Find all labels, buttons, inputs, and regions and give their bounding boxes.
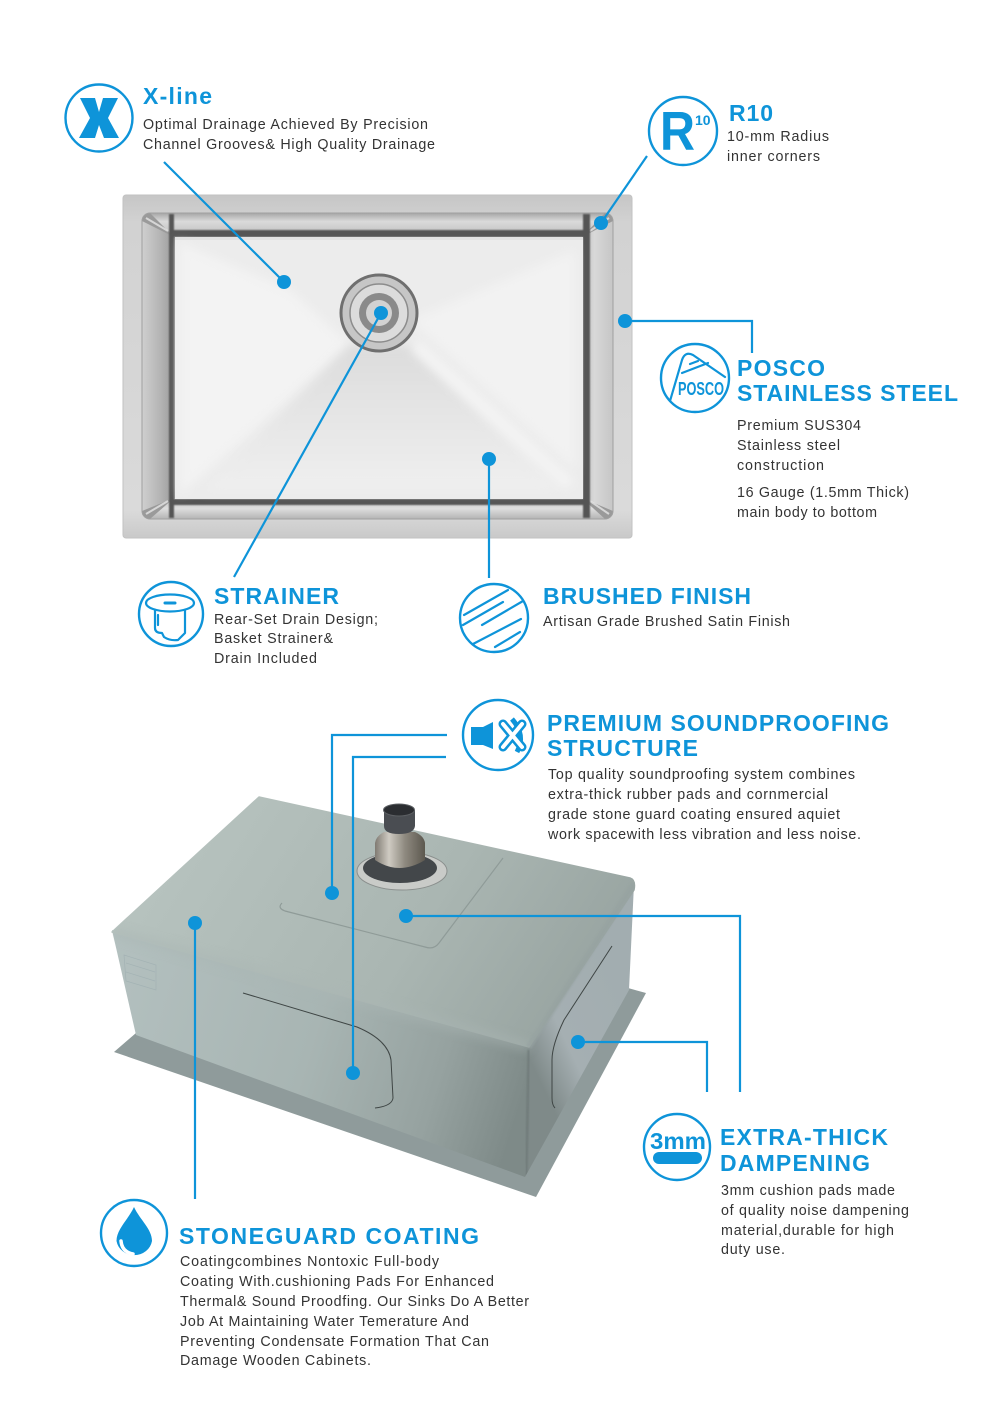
icon: soundproofing xyxy=(463,700,533,770)
icon: X-line xyxy=(66,84,132,152)
heading: POSCO stainless steel: STAINLESS STEEL xyxy=(737,380,958,406)
text: dampening description: material,durable for high xyxy=(721,1223,894,1239)
text: POSCO description: Premium SUS304 xyxy=(737,418,861,434)
heading: R10: R10 xyxy=(729,100,773,126)
heading: POSCO stainless steel: POSCO xyxy=(737,355,825,381)
text: dampening description: duty use. xyxy=(721,1242,785,1258)
Soundproofing feature xyxy=(463,700,889,843)
heading: extra-thick dampening: EXTRA-THICK xyxy=(720,1124,888,1150)
text: POSCO description: main body to bottom xyxy=(737,505,877,521)
icon: R10 xyxy=(649,97,717,165)
icon: R10: 10 xyxy=(695,112,711,128)
heading: premium soundproofing structure: STRUCTURE xyxy=(547,735,698,761)
text: soundproofing description: Top quality soundproofing system combines xyxy=(548,767,855,783)
text: X-line description: Optimal Drainage Achieved By Precision xyxy=(143,117,428,133)
POSCO feature xyxy=(661,344,958,521)
heading: premium soundproofing structure xyxy=(547,710,889,761)
text: stoneguard description xyxy=(180,1254,529,1369)
Brushed finish feature xyxy=(460,583,790,652)
drain xyxy=(341,275,417,351)
side pad xyxy=(552,946,612,1108)
text: stoneguard description: Coatingcombines Nontoxic Full-body xyxy=(180,1254,440,1270)
heading: premium soundproofing structure: PREMIUM SOUNDPROOFING xyxy=(547,710,889,736)
text: brushed finish description: Artisan Grade Brushed Satin Finish xyxy=(543,614,790,630)
heading: strainer: STRAINER xyxy=(214,583,339,609)
text: stoneguard description: Damage Wooden Cabinets. xyxy=(180,1353,371,1369)
text: stoneguard description: Preventing Condensate Formation That Can xyxy=(180,1334,489,1350)
icon: POSCO: POSCO xyxy=(678,379,724,399)
text: dampening description: 3mm cushion pads made xyxy=(721,1183,895,1199)
heading: brushed finish: BRUSHED FINISH xyxy=(543,583,751,609)
X-line feature xyxy=(66,83,435,153)
icon: brushed finish xyxy=(460,584,528,652)
text: dampening description xyxy=(721,1183,909,1258)
text: soundproofing description: grade stone guard coating ensured aquiet xyxy=(548,807,840,823)
text: R10 description: 10-mm Radius xyxy=(727,129,829,145)
text: POSCO description: construction xyxy=(737,458,824,474)
callout lines and dots: top sink xyxy=(164,156,752,578)
text: X-line description xyxy=(143,117,435,153)
icon: strainer xyxy=(139,582,203,646)
text: soundproofing description xyxy=(547,767,861,843)
icon: POSCO xyxy=(661,344,729,412)
text: POSCO description: Stainless steel xyxy=(737,438,840,454)
text: stoneguard description: Thermal& Sound Proodfing. Our Sinks Do A Better xyxy=(180,1294,529,1310)
text: R10 description: inner corners xyxy=(727,149,820,165)
text: stoneguard description: Job At Maintaining Water Temerature And xyxy=(180,1314,469,1330)
callout lines and dots: underside sink xyxy=(188,735,740,1199)
icon: R10: R xyxy=(660,100,695,162)
top view sink photo xyxy=(123,195,632,538)
text: R10 description xyxy=(727,129,829,165)
R10 feature xyxy=(649,97,829,165)
drain fitting xyxy=(357,804,447,890)
heading: stoneguard coating: STONEGUARD COATING xyxy=(179,1223,479,1249)
icon: 3mm pad xyxy=(644,1114,710,1180)
heading: extra-thick dampening: DAMPENING xyxy=(720,1150,870,1176)
text: POSCO description xyxy=(737,418,909,521)
heading: extra-thick dampening xyxy=(720,1124,888,1176)
text: dampening description: of quality noise dampening xyxy=(721,1203,909,1219)
text: strainer description: Rear-Set Drain Design; xyxy=(214,612,378,628)
plate xyxy=(280,858,503,948)
text: stoneguard description: Coating With.cushioning Pads For Enhanced xyxy=(180,1274,494,1290)
text: soundproofing description: work spacewith less vibration and less noise. xyxy=(547,827,861,843)
icon: water drop xyxy=(101,1200,167,1266)
heading: POSCO stainless steel xyxy=(737,355,958,406)
Strainer feature xyxy=(139,582,378,667)
icon: 3mm pad: 3mm xyxy=(650,1128,706,1154)
Extra-thick dampening feature xyxy=(644,1114,909,1258)
text: soundproofing description: extra-thick rubber pads and cornmercial xyxy=(548,787,828,803)
text: strainer description: Drain Included xyxy=(214,651,317,667)
text: strainer description xyxy=(214,612,378,667)
Stoneguard coating feature xyxy=(101,1200,529,1369)
underside sink photo xyxy=(112,797,646,1197)
front pad xyxy=(243,993,393,1108)
text: X-line description: Channel Grooves& High Quality Drainage xyxy=(143,137,435,153)
text: POSCO description: 16 Gauge (1.5mm Thick) xyxy=(737,485,909,501)
heading: X-line: X-line xyxy=(143,83,212,109)
label sticker xyxy=(124,955,156,990)
text: strainer description: Basket Strainer& xyxy=(214,631,333,647)
